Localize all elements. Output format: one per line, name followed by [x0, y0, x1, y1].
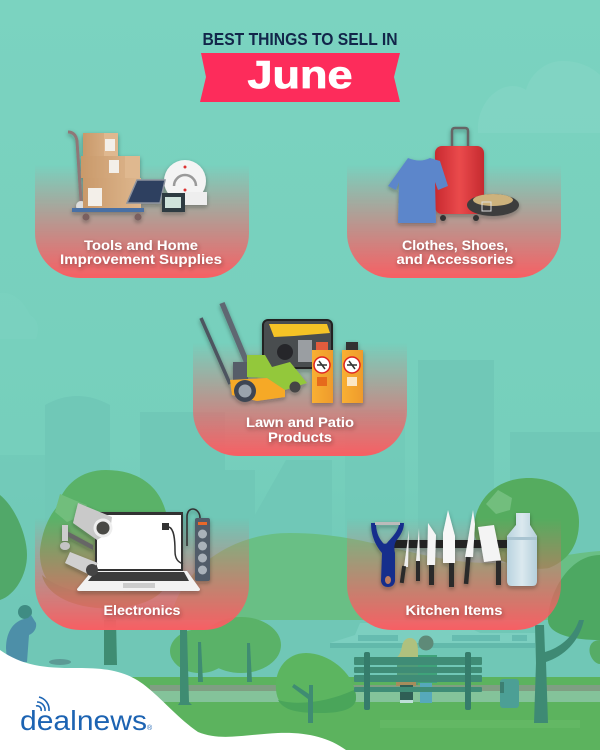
label: Lawn and Patio	[246, 414, 354, 430]
hill	[170, 533, 600, 620]
panel: tools and home improvement	[35, 132, 249, 278]
river	[0, 620, 600, 680]
logo signal icon	[36, 697, 49, 711]
icon: hand cart, boxes, solar panel, smoke detector	[68, 132, 207, 220]
city skyline	[0, 360, 600, 625]
ground	[0, 677, 600, 750]
panel: kitchen items	[347, 510, 561, 630]
icon: mower, generator, repellent bottles	[201, 303, 363, 403]
label	[246, 414, 354, 445]
couple on bench	[396, 636, 437, 703]
label	[60, 237, 222, 267]
label: Products	[268, 429, 332, 445]
icon: laptop, cameras, power strip	[60, 503, 210, 591]
tree: right	[474, 478, 600, 723]
title: BEST THINGS TO SELL IN	[202, 29, 398, 49]
panel: electronics	[35, 503, 249, 630]
label: Improvement Supplies	[60, 251, 222, 267]
ribbon banner	[200, 53, 400, 102]
tree: bush	[276, 653, 356, 723]
man on phone	[6, 605, 71, 665]
tree: centre group	[170, 617, 281, 705]
logo: dealnews: ®	[147, 724, 153, 732]
label: and Accessories	[396, 251, 514, 267]
icon: peeler, knives, shaker	[371, 510, 537, 587]
icon: t-shirt, suitcase, belt	[388, 128, 519, 223]
label	[396, 237, 514, 267]
label: Clothes, Shoes,	[402, 237, 508, 253]
panel: lawn and patio	[193, 303, 407, 456]
trash bin	[500, 679, 519, 708]
logo: dealnews: dealnews	[20, 705, 147, 736]
label: Kitchen Items	[406, 602, 503, 618]
panel: clothes, shoes, accessories	[347, 128, 561, 278]
park bench	[354, 652, 482, 710]
ribbon banner: June	[248, 54, 352, 97]
label: Electronics	[104, 602, 181, 618]
clouds	[0, 61, 600, 339]
label: Tools and Home	[84, 237, 198, 253]
tree: back left	[40, 470, 171, 665]
tree: left edge	[0, 495, 27, 600]
white logo area	[0, 650, 346, 750]
boat	[330, 623, 535, 648]
